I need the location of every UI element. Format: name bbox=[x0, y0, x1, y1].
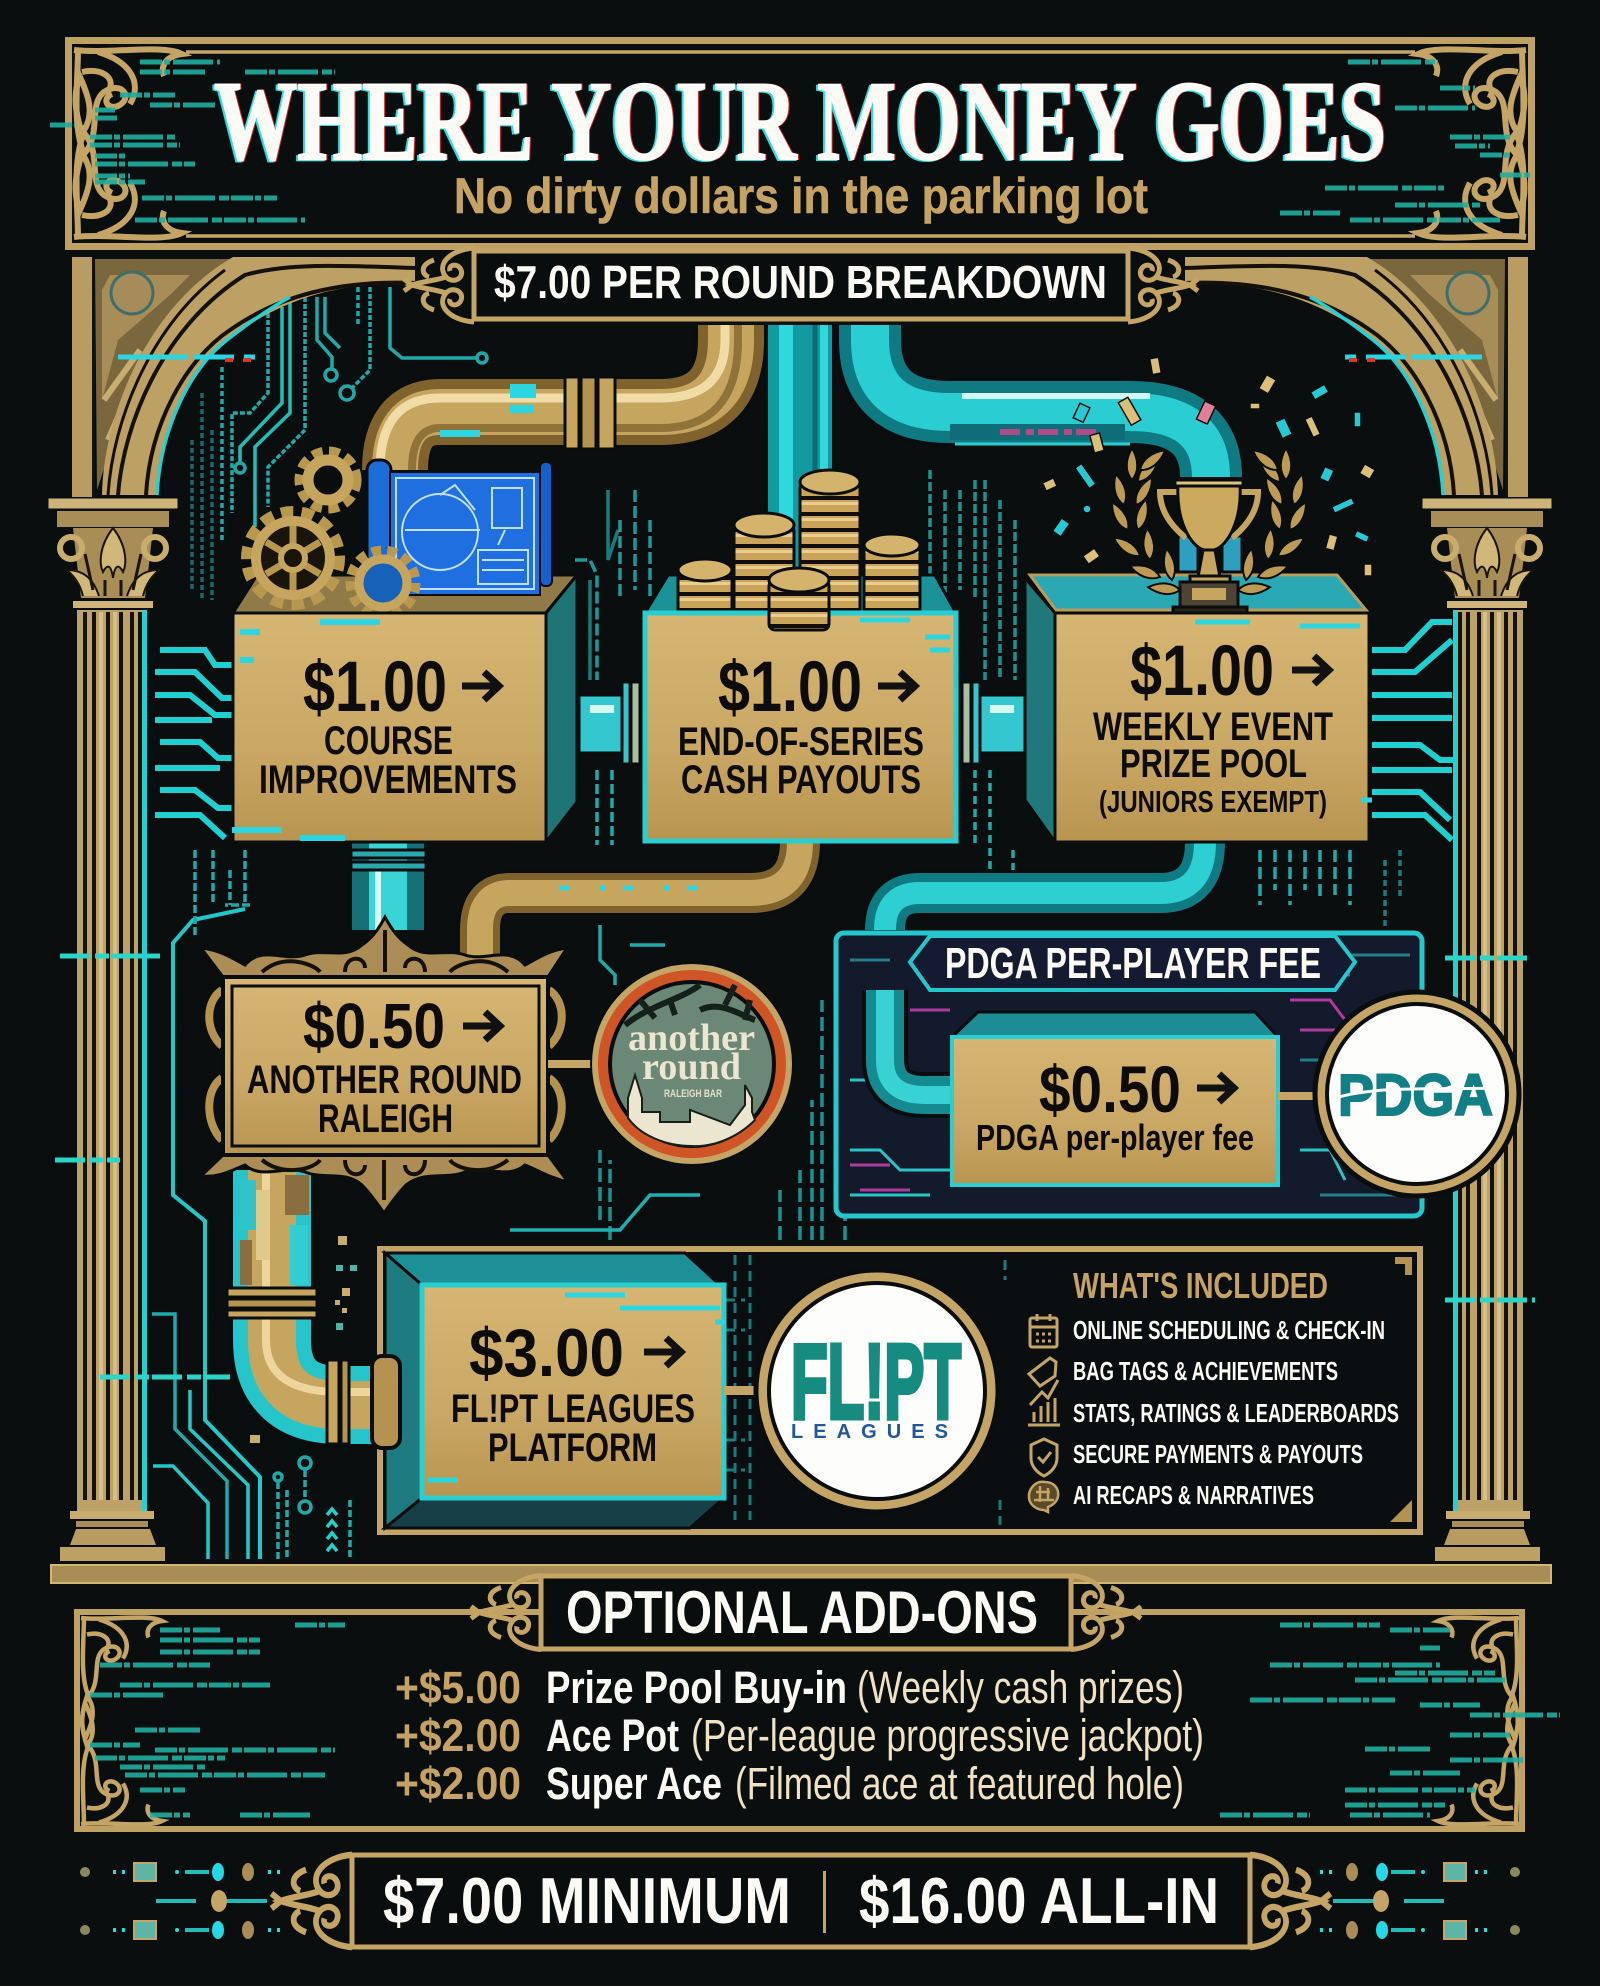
box label line 2: PLATFORM bbox=[488, 1426, 657, 1470]
box label line 1: WEEKLY EVENT bbox=[1093, 705, 1333, 749]
panel background bbox=[836, 933, 1422, 1216]
orange ring bbox=[598, 970, 786, 1158]
name: Prize Pool Buy-in bbox=[546, 1662, 847, 1713]
gears icon bbox=[248, 453, 414, 614]
fee box top bbox=[952, 1012, 1278, 1037]
icon: tag bbox=[1029, 1358, 1056, 1386]
box label line 2: IMPROVEMENTS bbox=[259, 758, 517, 802]
coin stacks icon bbox=[678, 470, 920, 625]
gold confetti bbox=[1042, 357, 1375, 576]
frame inner rules bbox=[186, 52, 1415, 236]
box top bbox=[645, 575, 956, 613]
scroll right bbox=[1250, 1855, 1330, 1947]
teal vertical pipe bbox=[786, 325, 824, 620]
arch right bbox=[1185, 257, 1528, 497]
item 2: BAG TAGS & ACHIEVEMENTS bbox=[1073, 1356, 1338, 1386]
box label line 2: CASH PAYOUTS bbox=[681, 758, 921, 802]
decoration left bbox=[80, 1863, 280, 1939]
gold pipe glitch bbox=[440, 384, 536, 437]
frame corner top right bbox=[1418, 48, 1526, 210]
banner scroll right bbox=[1128, 248, 1198, 322]
logo text: PDGA bbox=[1338, 1063, 1493, 1128]
note: (Weekly cash prizes) bbox=[857, 1662, 1184, 1713]
logo: PDGA bbox=[1315, 992, 1519, 1196]
heading text: OPTIONAL ADD-ONS bbox=[566, 1579, 1038, 1646]
pipe flange at box bbox=[372, 1356, 400, 1448]
logo: another round bbox=[591, 963, 793, 1165]
box label line 1: COURSE bbox=[324, 719, 453, 763]
background circuit traces bbox=[152, 287, 1454, 1559]
logo leagues: LEAGUES bbox=[791, 1421, 948, 1443]
teal confetti bbox=[1052, 384, 1370, 543]
panel corner bottom left bbox=[81, 1704, 162, 1826]
box arrow bbox=[878, 672, 915, 700]
frame corner bottom right bbox=[1418, 77, 1526, 239]
all-in text: $16.00 ALL-IN bbox=[859, 1864, 1219, 1937]
ornament bottom scrolls bbox=[262, 1160, 508, 1200]
connector bbox=[724, 1386, 760, 1395]
plaque amount: $0.50 bbox=[303, 990, 445, 1062]
gold elbow pipe to platform bbox=[227, 1170, 395, 1444]
heading banner plate bbox=[541, 1576, 1071, 1649]
glitch squares near pipe bbox=[250, 1236, 357, 1443]
fee connector bbox=[1278, 1092, 1318, 1100]
item 5: AI RECAPS & NARRATIVES bbox=[1073, 1480, 1314, 1510]
circuit accents bbox=[850, 955, 1410, 1195]
pipes: top distribution bbox=[380, 325, 1211, 620]
teal pipe below course improvements bbox=[351, 840, 426, 930]
plaque label line 1: ANOTHER ROUND bbox=[247, 1058, 522, 1102]
banner plate bbox=[474, 251, 1128, 319]
arch: left and right columns bbox=[48, 257, 1552, 1583]
box top and side bbox=[233, 575, 577, 613]
plaque face bbox=[223, 977, 548, 1155]
trophy icon bbox=[1160, 480, 1258, 615]
front coin stack bbox=[769, 568, 829, 630]
blueprint icon bbox=[367, 460, 552, 595]
banner scroll left bbox=[471, 1576, 541, 1650]
frame corner top left bbox=[74, 48, 182, 210]
logo disc bbox=[769, 1283, 985, 1499]
box front bbox=[422, 1285, 724, 1498]
panel circuit lines bbox=[725, 1255, 1005, 1525]
box: end-of-series cash payouts bbox=[645, 470, 956, 841]
name: Super Ace bbox=[546, 1758, 722, 1809]
header text: PDGA PER-PLAYER FEE bbox=[945, 939, 1321, 988]
icon: calendar bbox=[1030, 1314, 1057, 1347]
column glitch marks bbox=[55, 956, 1535, 1377]
price: +$2.00 bbox=[395, 1758, 521, 1809]
teal pipe below prize pool bbox=[885, 842, 1205, 930]
note: (Per-league progressive jackpot) bbox=[691, 1710, 1204, 1761]
price: +$5.00 bbox=[395, 1662, 521, 1713]
box connector left bbox=[565, 682, 640, 764]
separator bbox=[823, 1871, 826, 1933]
arch left bbox=[72, 257, 415, 497]
ornament bottom bbox=[201, 1155, 568, 1213]
minimum text: $7.00 MINIMUM bbox=[383, 1864, 791, 1937]
fee arrow bbox=[1197, 1074, 1234, 1102]
logo rings bbox=[1315, 992, 1519, 1196]
panel corner top left bbox=[81, 1616, 162, 1738]
plaque arrow bbox=[463, 1012, 500, 1040]
branches bbox=[625, 985, 755, 1025]
panel corner bottom right bbox=[1438, 1704, 1519, 1826]
panel header bbox=[910, 936, 1355, 990]
logo disc bbox=[1327, 1004, 1507, 1184]
box amount: $1.00 bbox=[303, 648, 447, 727]
logo word 1: another bbox=[628, 1017, 755, 1059]
banner scroll left bbox=[404, 248, 474, 322]
price: +$2.00 bbox=[395, 1710, 521, 1761]
title panel bbox=[50, 37, 1535, 250]
item 3: STATS, RATINGS & LEADERBOARDS bbox=[1073, 1398, 1399, 1428]
gold pipe flange bbox=[565, 377, 615, 449]
logo swoosh bbox=[1335, 1088, 1495, 1098]
box label line 2: PRIZE POOL bbox=[1120, 742, 1307, 786]
glitch marks bbox=[1195, 622, 1372, 800]
box top bbox=[385, 1253, 720, 1285]
box side bbox=[385, 1253, 422, 1528]
logo rings bbox=[756, 1270, 998, 1512]
green field bbox=[610, 982, 774, 1146]
fee label: PDGA per-player fee bbox=[976, 1117, 1254, 1158]
icon: shield bbox=[1031, 1439, 1057, 1476]
row 1 bbox=[395, 1662, 1184, 1713]
note: (Filmed ace at featured hole) bbox=[735, 1758, 1184, 1809]
plaque: another round raleigh bbox=[201, 917, 568, 1213]
box front bbox=[645, 613, 956, 841]
frame corner bottom left bbox=[74, 77, 182, 239]
right column bbox=[1422, 498, 1552, 1561]
plaque inner line bbox=[232, 986, 539, 1146]
fee amount: $0.50 bbox=[1039, 1052, 1181, 1126]
box arrow bbox=[462, 672, 499, 700]
item 1: ONLINE SCHEDULING & CHECK-IN bbox=[1073, 1315, 1385, 1345]
box amount: $1.00 bbox=[1130, 632, 1274, 711]
box label line 1: END-OF-SERIES bbox=[678, 720, 924, 764]
row 3 bbox=[395, 1758, 1184, 1809]
panel: platform and what's included bbox=[372, 1249, 1420, 1532]
panel frame bbox=[74, 1609, 1525, 1832]
what's included heading: WHAT'S INCLUDED bbox=[1073, 1265, 1328, 1306]
icon: brain bbox=[1029, 1482, 1058, 1512]
item 4: SECURE PAYMENTS & PAYOUTS bbox=[1073, 1439, 1363, 1469]
fee box front bbox=[952, 1037, 1278, 1185]
panel: PDGA per-player fee bbox=[836, 933, 1422, 1216]
box front bbox=[1055, 613, 1369, 842]
teal pipe to prize pool bbox=[870, 325, 1211, 477]
scroll left bbox=[272, 1855, 352, 1947]
box amount: $3.00 bbox=[469, 1315, 624, 1391]
box label line 1: FL!PT LEAGUES bbox=[451, 1387, 695, 1431]
box top and side bbox=[1030, 575, 1366, 610]
subtitle: No dirty dollars in the parking lot bbox=[454, 168, 1148, 224]
ornament top bbox=[201, 917, 567, 977]
banner scroll right bbox=[1071, 1576, 1141, 1650]
logo FLIPT: FL!PT bbox=[791, 1323, 961, 1441]
bottom total banner bbox=[80, 1855, 1520, 1947]
panel border bbox=[380, 1249, 1420, 1532]
ornament top scrolls bbox=[262, 930, 508, 972]
badge rings bbox=[591, 963, 793, 1165]
frame outer border bbox=[65, 37, 1535, 250]
gold pipe below end of series bbox=[480, 842, 800, 975]
box label line 3: (JUNIORS EXEMPT) bbox=[1099, 784, 1327, 819]
logo small text: RALEIGH BAR bbox=[664, 1088, 722, 1100]
box bottom bbox=[385, 1498, 724, 1528]
inner teal pipe bbox=[885, 990, 955, 1095]
glitch marks bbox=[428, 1295, 725, 1480]
left column bbox=[48, 498, 178, 1561]
side scrolls bbox=[209, 990, 562, 1140]
name: Ace Pot bbox=[546, 1710, 679, 1761]
box amount: $1.00 bbox=[718, 648, 862, 727]
box: weekly event prize pool bbox=[1025, 357, 1375, 842]
decoration right bbox=[1320, 1863, 1520, 1939]
glitch data lines bbox=[90, 1625, 1560, 1815]
plaque label line 2: RALEIGH bbox=[318, 1097, 453, 1141]
base bar bbox=[51, 1565, 1551, 1583]
plaque connector bbox=[548, 1060, 596, 1068]
skyline bbox=[628, 1075, 755, 1146]
banner: per round breakdown bbox=[404, 248, 1198, 322]
panel corner marks bbox=[1390, 1257, 1412, 1522]
logo word 2: round bbox=[642, 1046, 741, 1088]
icon: chart bbox=[1028, 1380, 1060, 1425]
box: course improvements bbox=[232, 453, 577, 842]
panel: optional add-ons bbox=[74, 1576, 1560, 1832]
pipes: lower connections bbox=[227, 840, 1205, 1444]
box arrow bbox=[644, 1338, 681, 1366]
gold pipe to course improvements bbox=[380, 325, 738, 470]
laurel wreath icon bbox=[1107, 446, 1311, 595]
glitch marks bbox=[860, 620, 950, 650]
left branch bbox=[1107, 446, 1180, 595]
banner text: $7.00 PER ROUND BREAKDOWN bbox=[494, 256, 1107, 308]
plate bbox=[352, 1855, 1250, 1947]
panel corner top right bbox=[1438, 1616, 1519, 1738]
glitch data lines bbox=[50, 62, 1530, 220]
box connector right bbox=[962, 682, 1040, 764]
row 2 bbox=[395, 1710, 1204, 1761]
box front bbox=[233, 613, 546, 842]
right branch bbox=[1238, 446, 1311, 595]
glitch marks bbox=[232, 622, 380, 838]
box arrow bbox=[1292, 656, 1329, 684]
